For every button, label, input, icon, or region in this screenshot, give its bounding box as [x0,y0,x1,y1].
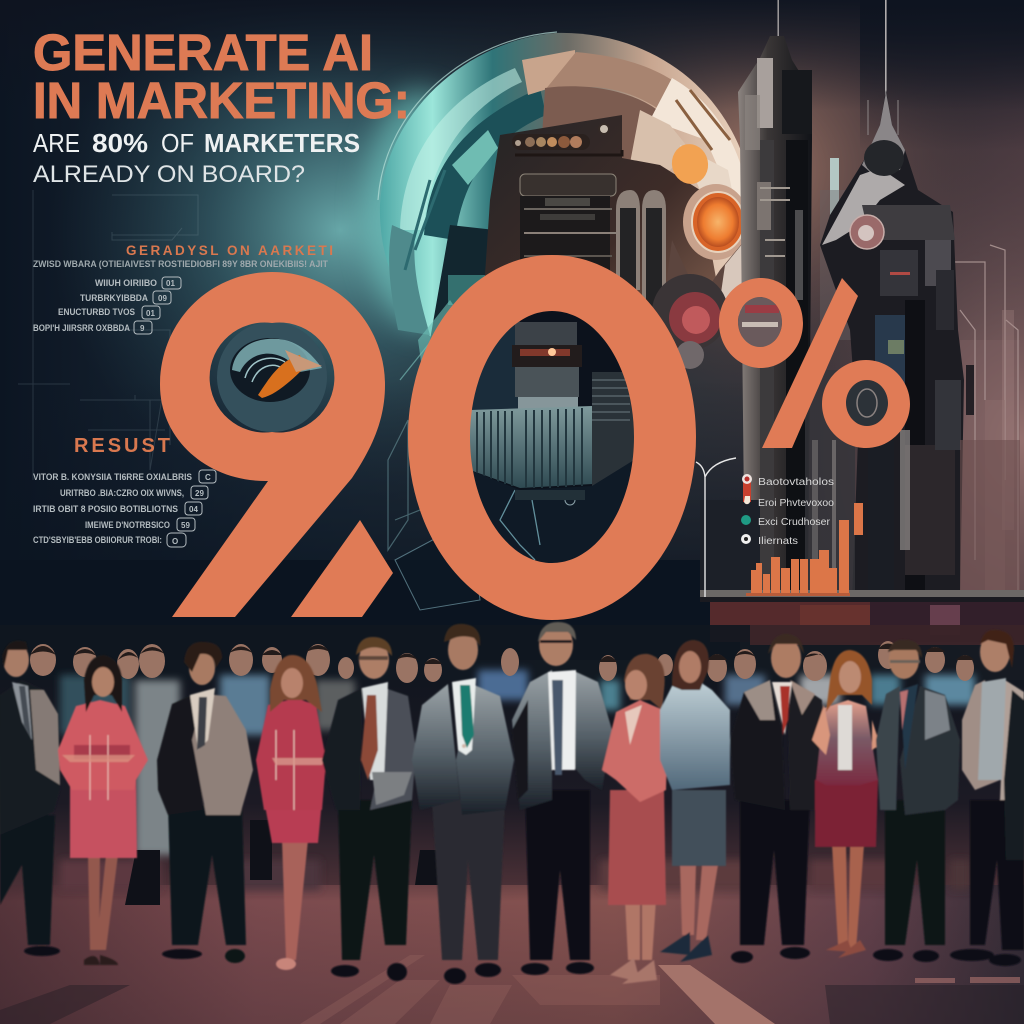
left panel: results list: IRTIB OBIT 8 POSIIO BOTIBLIOTNS [33,504,178,515]
background crowd [0,625,1024,905]
shell through the nine [217,322,327,432]
digit zero [408,255,696,620]
percent windows [738,297,888,426]
left panel: market list: BOPI'H JIIRSRR OXBBDA [33,323,130,334]
background legs [125,820,450,905]
crowd: front row [0,622,1024,984]
person: man in dark jacket with glasses [873,640,960,962]
street platform [700,590,1024,599]
legend [741,474,834,547]
cylinder [515,322,577,352]
left panel: results list: IMEIWE D'NOTRBSICO [85,520,170,531]
bar chart [746,503,863,596]
subtitle: OF [161,128,194,158]
teal plates [400,68,522,230]
orange lamp [668,141,712,187]
teal lower lines [400,330,480,440]
left panel: results list: O [172,537,178,546]
person: woman in light blue coat [660,640,730,962]
helmet crown [522,50,576,95]
person: woman in coral dress [58,655,148,965]
connector line from zero to chart [696,458,736,597]
left panel: market list: 09 [158,294,167,303]
floor [0,860,1024,1024]
left panel: market list: ZWISD WBARA (OTIEIAIVEST ROSTIEDIOBFI 89Y 8BR ONEKIBIIS! AJIT [33,259,328,269]
title [33,24,410,129]
big number 90% [160,255,910,620]
person: man with glasses and blue tie [512,622,612,975]
gauge cluster [652,274,728,369]
legend marker: white [741,534,751,544]
lower dark [470,460,634,570]
person: man with striped red tie [322,637,416,981]
decimal point wedge [291,520,393,617]
ribbed box [470,406,592,488]
legend marker: teal [741,515,751,525]
person: man far right [950,630,1024,966]
person: woman in burgundy skirt [812,650,880,958]
machine seen through the zero [465,305,640,570]
legend: Baotovtaholos [758,477,834,488]
left panel: results list: VITOR B. KONYSIIA TI6RRE OXIALBRIS [33,472,192,483]
person: man with red tie [730,634,825,963]
left panel: market list: WIIUH OIRIIBO [95,278,157,289]
digit nine [160,272,385,617]
title: GENERATE AI [33,24,373,81]
left panel: results list: C [205,473,211,482]
vertical columns [616,190,666,318]
rivet row [512,134,590,150]
person: man with green tie [412,624,514,984]
light bar [830,158,839,248]
tower one [738,0,812,600]
left panel: results list: 04 [189,505,198,514]
person: woman in crimson dress [256,655,326,970]
results heading: RESUST [74,435,170,457]
left panel: market list: TURBRKYIBBDA [80,293,148,304]
left panel: results list: URITRBO .BIA:CZRO OIX WIVNS, [60,488,184,499]
percent sign [719,278,803,368]
subtitle [33,128,360,188]
subtitle: 80% [92,128,148,158]
orange eye [683,184,749,260]
person: woman in pink jacket [602,654,668,984]
subtitle: ALREADY ON BOARD? [33,161,305,188]
left panel: market list: 01 [146,309,155,318]
left panel: results list: 59 [181,521,190,530]
left panel: results list [33,435,216,547]
left panel: results list: CTD'SBYIB'EBB OBIIORUR TROBI: [33,535,162,546]
ghost towers right [952,245,1020,600]
panel heading: GERADYSL ON AARKETI [126,243,333,258]
person: man in black and tan suit [157,642,253,963]
teal helmet halo [365,90,475,330]
blueprint lines behind left panel [18,190,198,480]
tower three base [805,370,855,595]
illustration: city towers [700,0,1024,642]
legend: Eroi Phvtevoxoo [758,498,834,509]
subtitle: MARKETERS [204,128,360,158]
left panel: market list [33,243,333,334]
right ribbed [592,372,634,486]
tower two [820,0,964,600]
back row heads [30,641,974,683]
illustration: robot head [365,32,760,610]
control panel [520,174,616,296]
legend marker: red [742,474,752,504]
left panel: results list: 29 [195,489,204,498]
legend: Iliernats [758,536,798,547]
person: man far left [0,641,60,956]
title: IN MARKETING: [33,72,410,129]
left panel: market list: 01 [166,279,175,288]
left panel: market list: ENUCTURBD TVOS [58,307,135,318]
legend: Exci Crudhoser [758,517,831,528]
subtitle: ARE [33,128,80,158]
left panel: market list: 9 [140,324,145,333]
face plate [480,115,720,350]
